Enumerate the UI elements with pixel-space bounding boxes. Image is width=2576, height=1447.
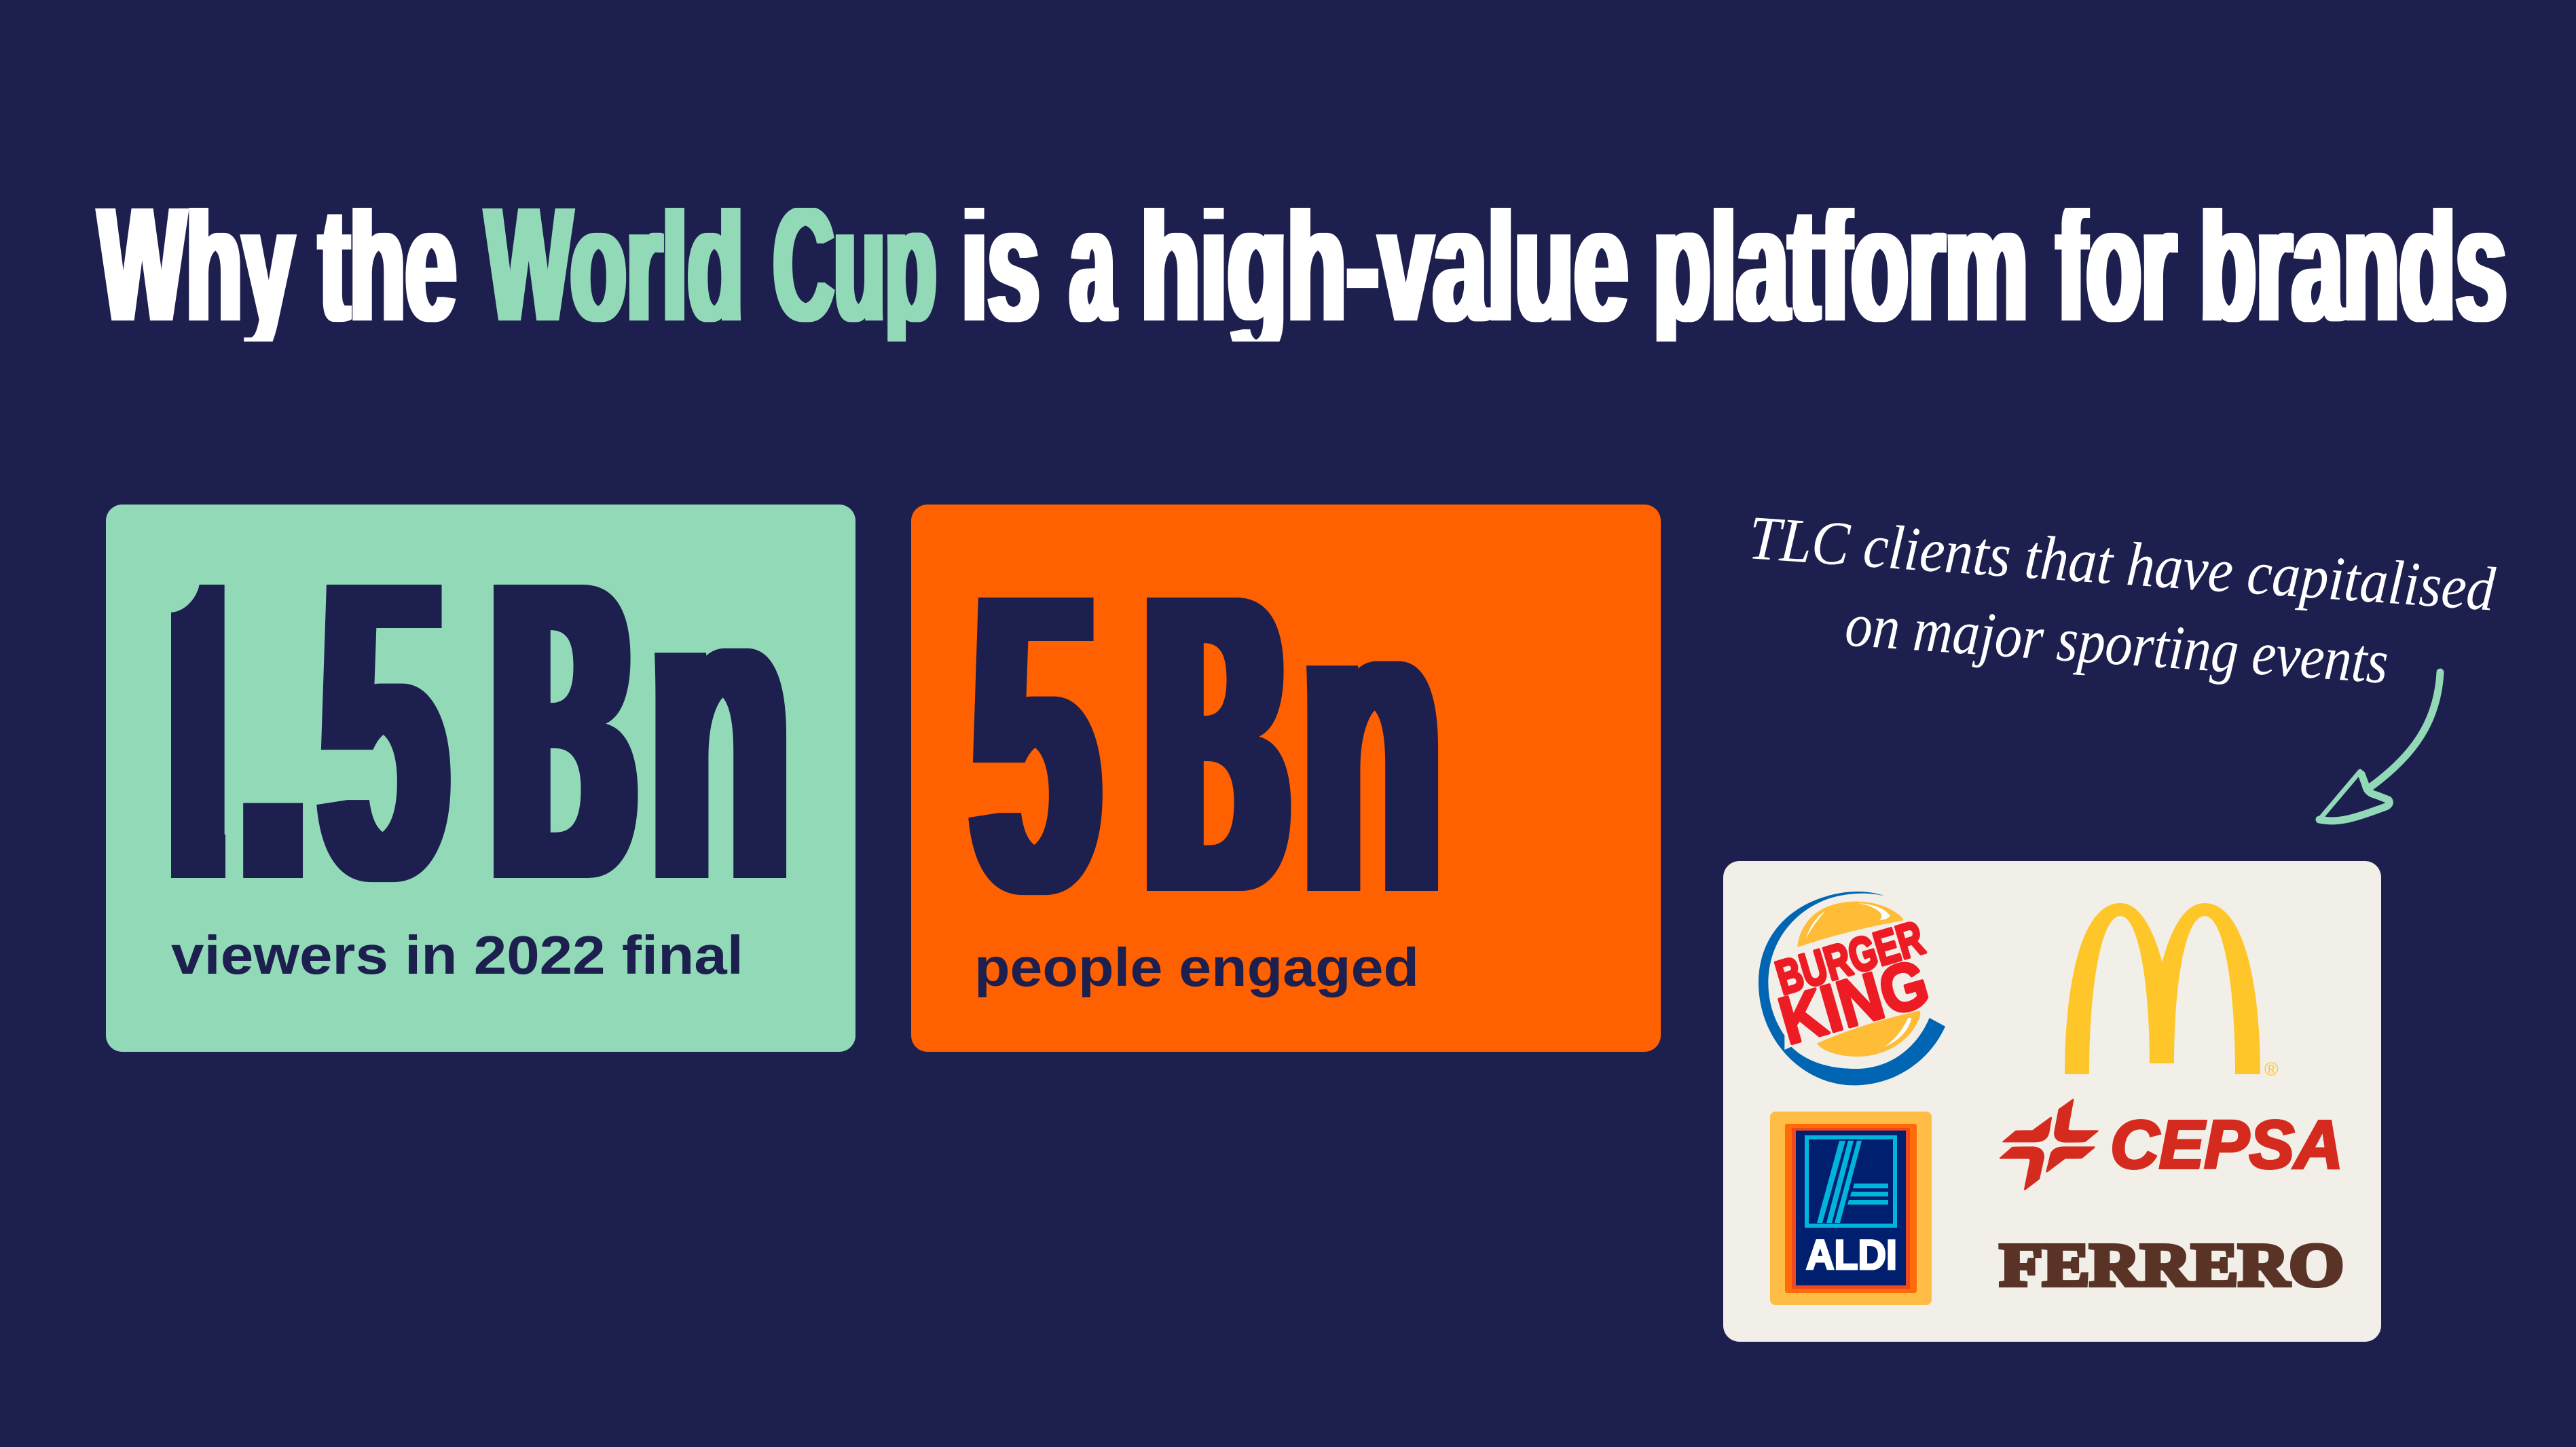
stat: 1.5 Bn: 5 bbox=[320, 492, 446, 969]
handwritten note: on major sporting events bbox=[1843, 589, 2391, 697]
logo: Burger King bbox=[1759, 892, 1945, 1085]
title: Why bbox=[98, 173, 294, 355]
logo: ALDI: ALDI bbox=[1806, 1232, 1897, 1278]
title: a bbox=[1070, 173, 1116, 355]
logo: Cepsa bbox=[2000, 1099, 2343, 1190]
title: the bbox=[319, 173, 456, 355]
stat: 1.5 Bn: 1 bbox=[113, 492, 256, 968]
stat: 1.5 Bn bbox=[113, 422, 790, 985]
panel: 1.5 Bn viewers bbox=[106, 505, 855, 1052]
stat label: people engaged bbox=[974, 937, 1419, 997]
panel: 5 Bn people bbox=[911, 505, 1661, 1052]
title highlight: World Cup: World bbox=[485, 173, 743, 355]
stat: 1.5 Bn: B bbox=[496, 492, 631, 968]
handwritten note: TLC clients that have capitalised bbox=[1747, 502, 2498, 624]
handwritten note bbox=[1747, 502, 2498, 697]
title: platform bbox=[1653, 173, 2028, 355]
logo: McDonald's: ® bbox=[2264, 1059, 2279, 1080]
stat: 5 Bn: 5 bbox=[972, 505, 1098, 982]
stat: 5 Bn: B bbox=[1149, 505, 1285, 981]
title: high-value bbox=[1141, 173, 1628, 355]
logo: Ferrero: FERRERO bbox=[2000, 1232, 2344, 1299]
logo: Cepsa: CEPSA bbox=[2110, 1107, 2343, 1183]
title bbox=[95, 208, 2507, 342]
stat label: viewers in 2022 final bbox=[171, 925, 743, 985]
logo: ALDI bbox=[1770, 1112, 1932, 1305]
title: for bbox=[2057, 173, 2176, 355]
logo: Burger King: KING bbox=[1771, 945, 1936, 1059]
title highlight: World Cup: Cup bbox=[773, 173, 936, 355]
title: is bbox=[961, 173, 1039, 355]
panel: client logos bbox=[1723, 861, 2381, 1342]
arrow bbox=[2319, 672, 2440, 821]
logo: Burger King: BURGER bbox=[1770, 911, 1930, 1004]
logo: McDonald's bbox=[2065, 903, 2279, 1080]
stat: 1.5 Bn: n bbox=[650, 492, 790, 968]
stat: 5 Bn: n bbox=[1302, 505, 1441, 981]
stat: 5 Bn bbox=[972, 505, 1441, 982]
stat: 1.5 Bn: . bbox=[246, 422, 300, 985]
